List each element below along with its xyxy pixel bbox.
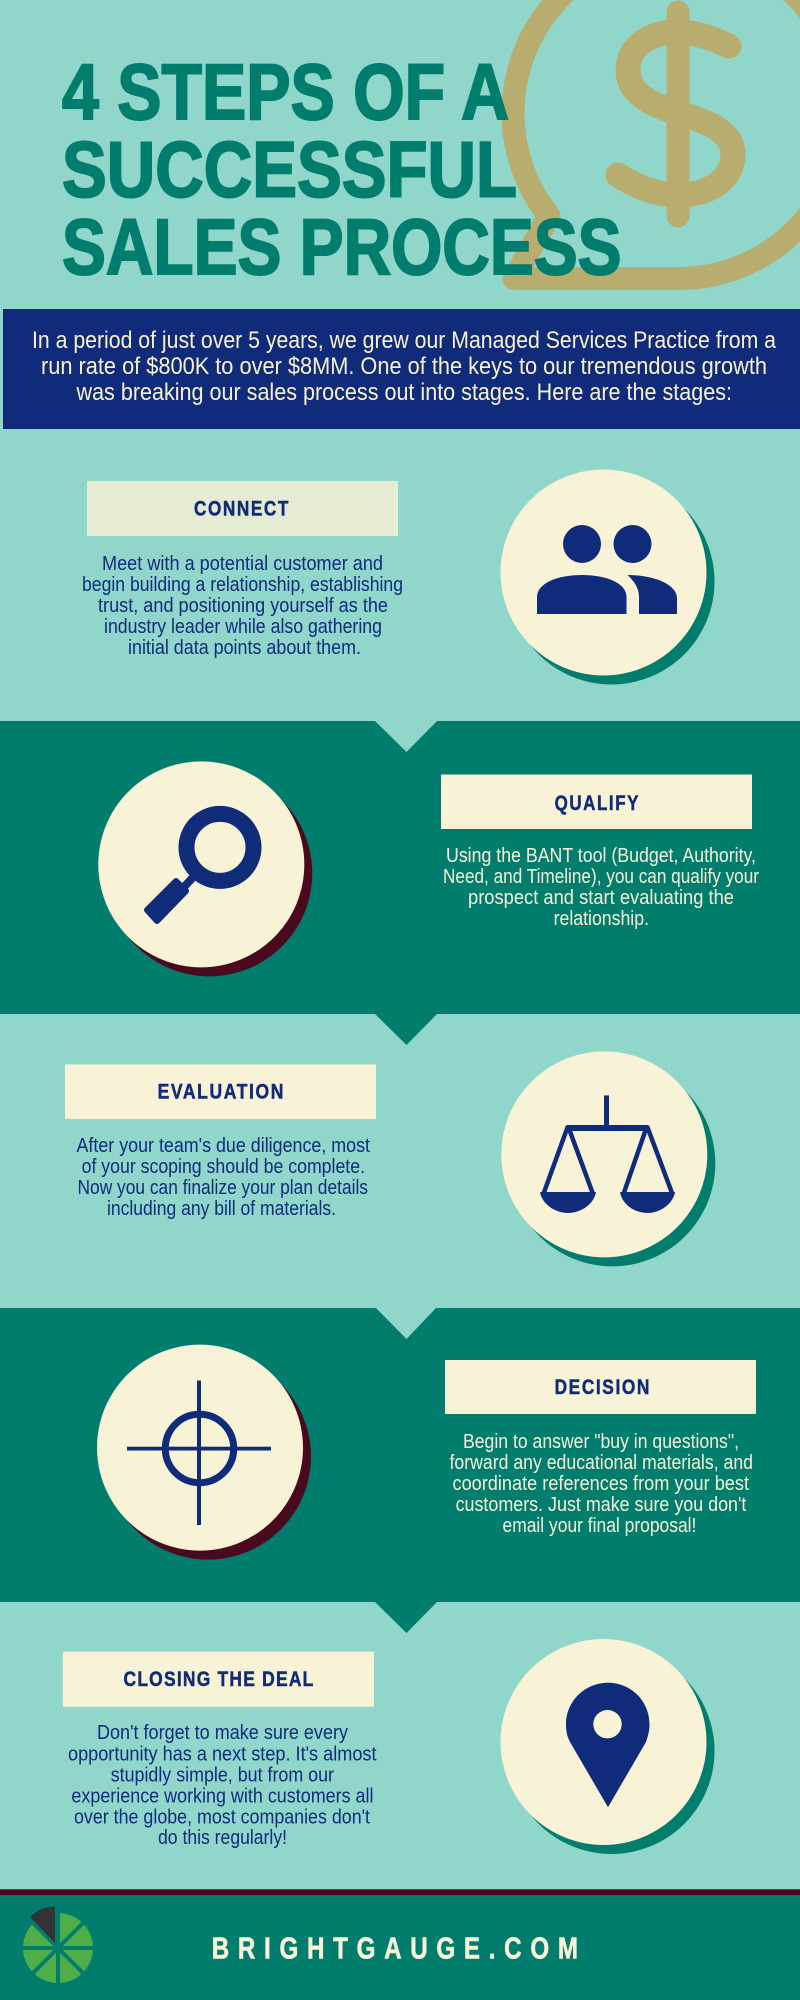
qualify text: Using the BANT tool (Budget, Authority, — [446, 845, 756, 867]
panel: closing the deal — [63, 1639, 715, 1854]
connect heading — [87, 481, 398, 536]
icon: map pin — [500, 1639, 714, 1854]
decision heading: DECISION — [555, 1375, 651, 1399]
closing text: over the globe, most companies don't — [74, 1806, 370, 1828]
qualify heading: QUALIFY — [555, 791, 640, 815]
icon: magnifying glass — [98, 761, 312, 976]
closing text — [68, 1722, 377, 1849]
evaluation text: Now you can finalize your plan details — [78, 1177, 368, 1199]
panel: intro banner — [3, 309, 800, 429]
decision text: coordinate references from your best — [452, 1473, 749, 1495]
decision text: forward any educational materials, and — [450, 1452, 753, 1474]
evaluation text: of your scoping should be complete. — [82, 1156, 365, 1178]
icon: brightgauge logo — [18, 1905, 98, 1988]
qualify text: Need, and Timeline), you can qualify your — [443, 866, 759, 888]
closing text: Don't forget to make sure every — [97, 1722, 348, 1744]
icon: crosshair target — [97, 1345, 311, 1560]
intro text: was breaking our sales process out into stages. Here are the stages: — [76, 379, 732, 406]
panel: evaluation — [65, 1051, 715, 1266]
title — [62, 47, 622, 291]
evaluation heading: EVALUATION — [158, 1080, 285, 1104]
panel: decision — [97, 1345, 756, 1560]
icon: balance scale — [501, 1051, 715, 1266]
title: 4 STEPS OF A — [62, 47, 509, 136]
qualify text: relationship. — [554, 908, 649, 930]
qualify text — [443, 845, 759, 930]
connect text: Meet with a potential customer and — [102, 553, 383, 575]
closing heading: CLOSING THE DEAL — [124, 1667, 314, 1691]
closing text: stupidly simple, but from our — [111, 1764, 334, 1786]
closing text: experience working with customers all — [71, 1786, 374, 1808]
evaluation text: including any bill of materials. — [107, 1198, 336, 1220]
decision heading — [445, 1360, 756, 1414]
website url: BRIGHTGAUGE.COM — [212, 1931, 587, 1965]
panel: connect — [82, 470, 714, 684]
panel: footer — [0, 1889, 800, 2000]
decision text: email your final proposal! — [502, 1515, 696, 1537]
connect heading: CONNECT — [194, 496, 290, 520]
closing text: opportunity has a next step. It's almost — [68, 1744, 377, 1766]
evaluation heading — [65, 1064, 376, 1119]
icon: dollar coin speech bubble — [513, 0, 800, 279]
panel: decision background — [0, 1308, 800, 1633]
qualify text: prospect and start evaluating the — [468, 887, 734, 909]
title: SUCCESSFUL — [62, 124, 517, 213]
decision text: customers. Just make sure you don't — [456, 1494, 747, 1516]
evaluation text: After your team's due diligence, most — [76, 1135, 370, 1157]
title: SALES PROCESS — [62, 202, 622, 291]
decision text — [450, 1431, 753, 1537]
closing text: do this regularly! — [158, 1827, 287, 1849]
decision text: Begin to answer "buy in questions", — [463, 1431, 739, 1453]
panel: qualify background — [0, 721, 800, 1045]
icon: people — [500, 470, 714, 684]
connect text: begin building a relationship, establishing — [82, 574, 403, 596]
panel: qualify — [98, 761, 759, 976]
connect text: trust, and positioning yourself as the — [98, 595, 388, 617]
intro text — [32, 327, 777, 406]
qualify heading — [441, 774, 752, 829]
closing heading — [63, 1652, 374, 1707]
connect text: initial data points about them. — [128, 637, 361, 659]
evaluation text — [76, 1135, 370, 1220]
connect text — [82, 553, 403, 659]
connect text: industry leader while also gathering — [104, 616, 382, 638]
